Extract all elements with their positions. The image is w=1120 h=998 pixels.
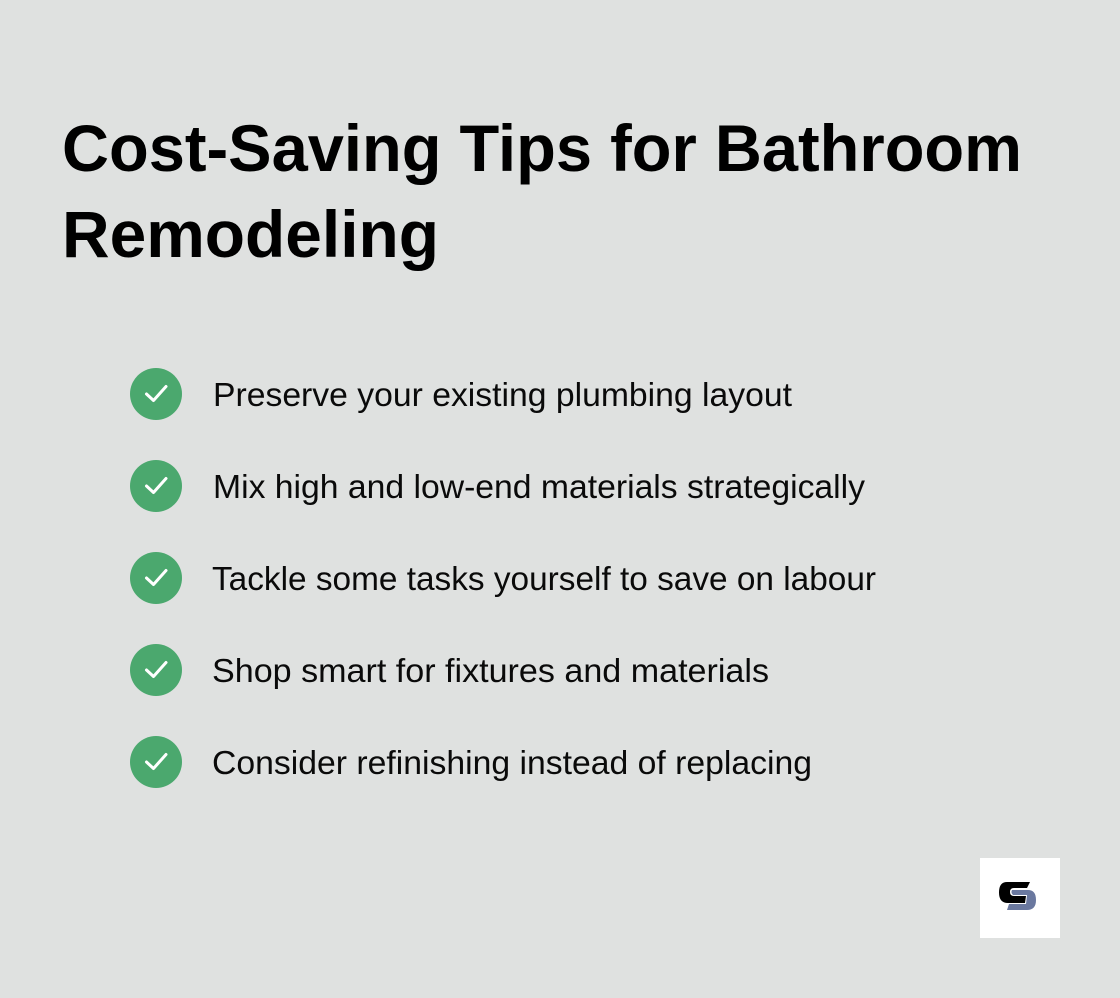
item: mix materials: Mix high and low-end materials strategically — [213, 468, 866, 505]
item: tackle tasks: Tackle some tasks yourself to save on labour — [212, 560, 876, 597]
item: preserve plumbing — [130, 368, 792, 420]
title: Cost-Saving Tips for Bathroom — [62, 111, 1022, 185]
item: tackle tasks — [130, 552, 876, 604]
item: refinishing: Consider refinishing instead of replacing — [212, 744, 812, 781]
item: shop smart: Shop smart for fixtures and materials — [212, 652, 769, 689]
checklist — [130, 368, 876, 788]
item: preserve plumbing: Preserve your existing plumbing layout — [213, 376, 792, 413]
title — [62, 111, 1022, 271]
item: refinishing — [130, 736, 812, 788]
item: shop smart — [130, 644, 769, 696]
title: Remodeling — [62, 197, 439, 271]
logo — [980, 858, 1060, 938]
item: mix materials — [130, 460, 866, 512]
